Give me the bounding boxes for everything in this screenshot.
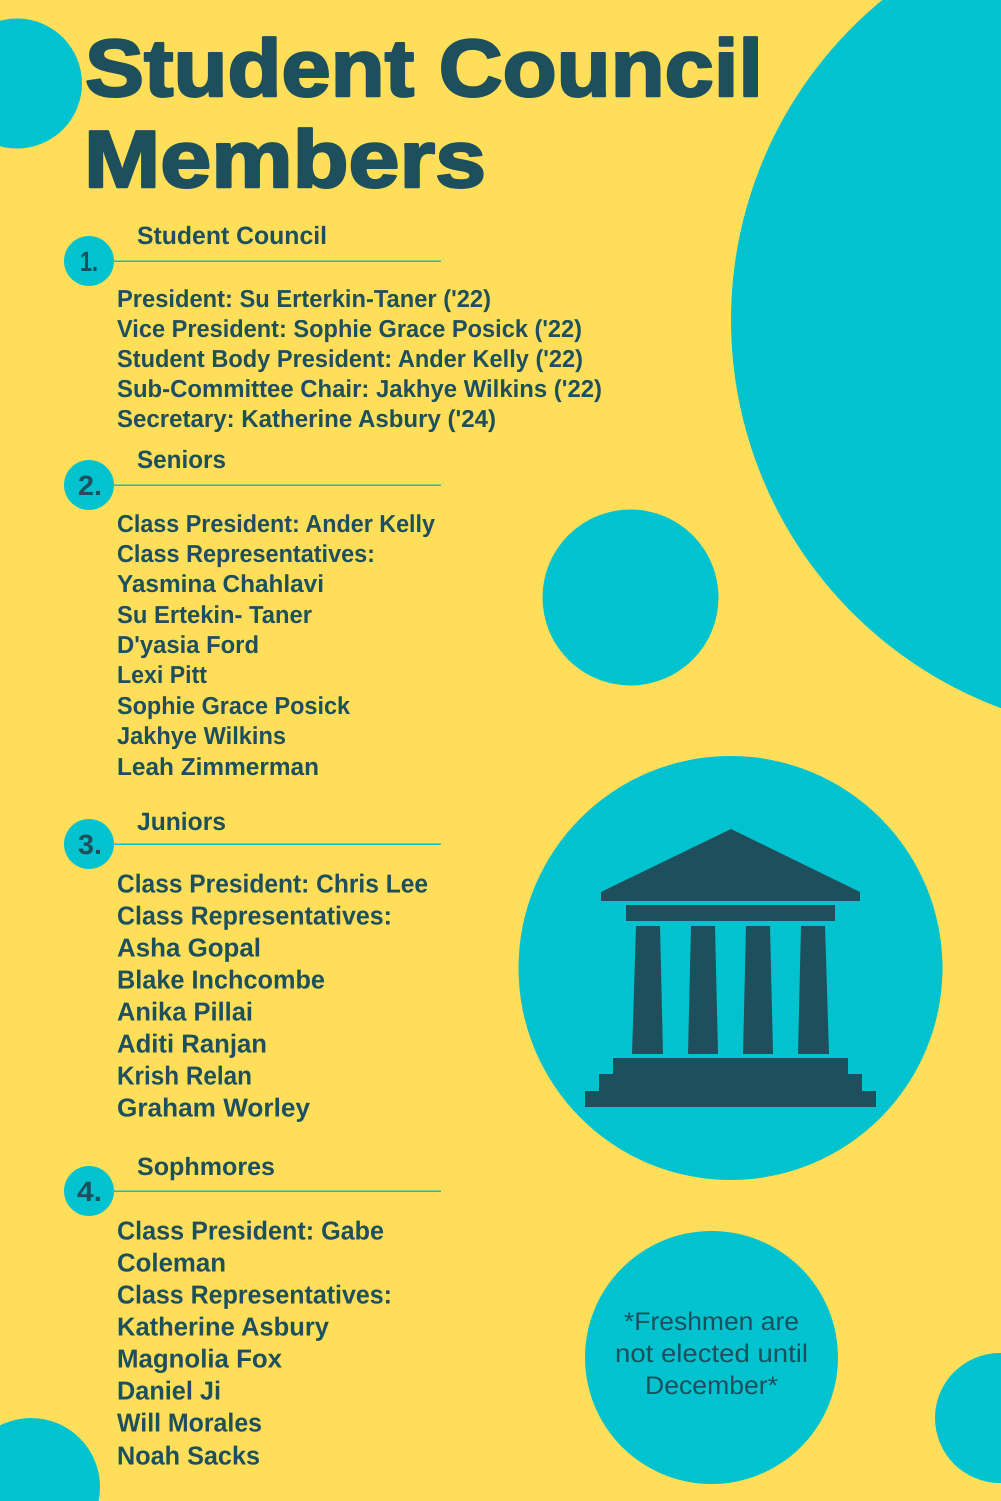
member list: Seniors (117, 511, 435, 781)
member list: Seniors: Class Representatives: (117, 541, 375, 568)
callout: freshmen note (585, 1231, 838, 1484)
title (84, 24, 763, 205)
title: Student Council (85, 24, 763, 114)
callout text: *Freshmen are (624, 1308, 799, 1336)
member list: Juniors: Class Representatives: (117, 900, 392, 930)
heading: Juniors: Juniors (137, 808, 226, 836)
member list: Seniors: Sophie Grace Posick (117, 693, 350, 720)
member list: Student Council: Secretary: Katherine Asbury ('24) (117, 406, 496, 433)
decorative circle: middle (542, 510, 718, 686)
member list: Juniors: Graham Worley (117, 1092, 311, 1122)
member list: Seniors: Leah Zimmerman (117, 754, 319, 781)
section 1: Student Council (64, 222, 602, 433)
member list: Sophmores: Will Morales (117, 1408, 262, 1438)
member list: Seniors: Lexi Pitt (117, 662, 207, 689)
section 2: Seniors (64, 446, 441, 781)
callout text (615, 1308, 808, 1400)
member list: Sophmores: Coleman (117, 1248, 226, 1278)
member list: Student Council: Sub-Committee Chair: Jakhye Wilkins ('22) (117, 376, 602, 403)
member list: Seniors: Yasmina Chahlavi (117, 571, 324, 598)
member list: Sophmores: Noah Sacks (117, 1440, 260, 1470)
callout text: December* (645, 1372, 778, 1400)
title: Members (84, 115, 486, 205)
member list: Juniors: Aditi Ranjan (117, 1028, 267, 1058)
heading: Seniors: Seniors (137, 446, 226, 474)
number badge 3 (64, 819, 114, 869)
member list: Juniors: Anika Pillai (117, 996, 253, 1026)
member list: Student Council (117, 286, 602, 433)
member list: Juniors: Blake Inchcombe (117, 964, 325, 994)
member list: Seniors: Class President: Ander Kelly (117, 511, 435, 538)
member list: Sophmores: Class Representatives: (117, 1280, 392, 1310)
callout text: not elected until (615, 1340, 808, 1368)
member list: Juniors (117, 868, 428, 1122)
member list: Seniors: D'yasia Ford (117, 632, 259, 659)
member list: Juniors: Krish Relan (117, 1060, 252, 1090)
decorative circle: top left (0, 18, 82, 148)
number badge 1 (64, 236, 114, 286)
member list: Juniors: Asha Gopal (117, 932, 261, 962)
member list: Sophmores (117, 1216, 392, 1470)
member list: Student Council: Student Body President: Ander Kelly ('22) (117, 346, 583, 373)
member list: Student Council: Vice President: Sophie Grace Posick ('22) (117, 316, 582, 343)
heading: Student Council: Student Council (137, 222, 327, 250)
decorative circle: large top right (731, 0, 1001, 734)
member list: Juniors: Class President: Chris Lee (117, 868, 428, 898)
number badge 3: 3. (78, 829, 102, 860)
member list: Seniors: Jakhye Wilkins (117, 723, 286, 750)
member list: Seniors: Su Ertekin- Taner (117, 602, 312, 629)
heading: Sophmores: Sophmores (137, 1153, 275, 1181)
member list: Sophmores: Class President: Gabe (117, 1216, 384, 1246)
member list: Sophmores: Katherine Asbury (117, 1312, 330, 1342)
number badge 1: 1. (80, 246, 98, 277)
number badge 4: 4. (77, 1176, 102, 1207)
section 3: Juniors (64, 808, 441, 1122)
number badge 2: 2. (78, 470, 102, 501)
member list: Sophmores: Magnolia Fox (117, 1344, 283, 1374)
icon panel: government building (518, 756, 942, 1180)
decorative circle: bottom left (0, 1418, 100, 1501)
number badge 4 (64, 1166, 114, 1216)
number badge 2 (64, 460, 114, 510)
icon: building (585, 829, 876, 1107)
member list: Sophmores: Daniel Ji (117, 1376, 221, 1406)
member list: Student Council: President: Su Erterkin-Taner ('22) (117, 286, 491, 313)
decorative circle: bottom right (935, 1353, 1001, 1483)
section 4: Sophmores (64, 1153, 441, 1470)
